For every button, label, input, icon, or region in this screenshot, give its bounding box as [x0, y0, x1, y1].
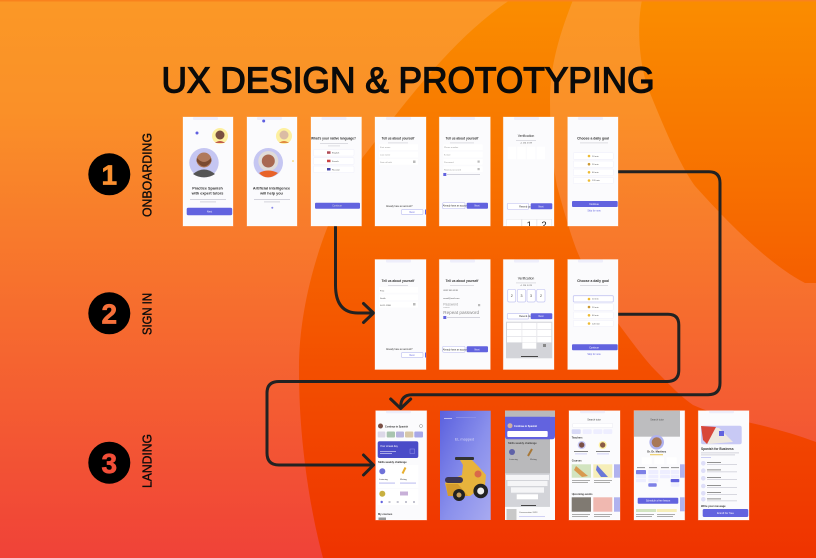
- screen: scooter splash: [440, 411, 491, 520]
- screen: sign in verification: 2: [540, 294, 542, 298]
- screen: native language: French: [332, 160, 340, 163]
- screen: verification: [503, 117, 554, 231]
- arrow: onboarding to landing: [391, 172, 720, 408]
- title: UX DESIGN & PROTOTYPING: [162, 60, 654, 100]
- arrow: sign in to landing: [267, 314, 679, 475]
- screen: tell us about yourself 1: Next: [410, 211, 415, 214]
- screen: sign in daily goal: 20 min: [592, 307, 599, 309]
- screen: home: Your streak day: [380, 444, 399, 448]
- step 3: landing: 3: [102, 448, 117, 479]
- screen: daily goal: Skip for now: [587, 210, 601, 213]
- screen: sign in daily goal: Continue: [589, 346, 599, 349]
- screen: sign in details 2: Next: [475, 348, 480, 351]
- screen: verification: Next: [539, 205, 544, 208]
- screen: daily goal: 10 min: [592, 156, 599, 158]
- screen: spanish for business: Spanish for Business: [701, 447, 734, 451]
- screen: tutor profile: Schedule a free lesson: [646, 500, 671, 503]
- screen: search tutor: Teachers: [572, 436, 583, 440]
- screen: home: Continue in Spanish: [385, 426, 409, 428]
- screen: tutor profile: Dr. Dr. Martinez: [647, 450, 667, 454]
- screen: tell us about yourself 1: Already have an account?: [386, 205, 413, 208]
- screen: sign in details 1: First: [380, 290, 385, 292]
- screen: daily goal: Continue: [589, 203, 599, 206]
- screen: sign in details 1: Smith: [380, 297, 386, 300]
- screen: daily goal: 60 min: [592, 172, 599, 174]
- screen: home: [376, 411, 427, 520]
- screen: sign in daily goal: 10 min: [592, 299, 599, 301]
- screen: tutor profile: Search tutor: [650, 418, 664, 421]
- screen: sign in details 1: 04.11.1986: [380, 305, 392, 307]
- screen: tell us about yourself 1: Date of birth: [380, 161, 393, 164]
- screen: sign in details 2: Tell us about yourself: [446, 279, 479, 283]
- screen: native language: Russian: [332, 169, 341, 171]
- screen: home: My courses: [378, 512, 393, 516]
- step 1: onboarding: [88, 133, 154, 217]
- screen: tell us about yourself 2: Next: [475, 205, 480, 208]
- screen: sign in details 2: email@mail.com: [443, 298, 460, 300]
- screen: home: Listening: [379, 478, 389, 481]
- screen: sign in details 2: ********: [443, 308, 450, 310]
- screen: sign in details 1: [375, 260, 426, 370]
- screen: home: Writing: [400, 478, 408, 481]
- screen: native language: Continue: [332, 205, 342, 208]
- screen: artificial intelligence: [247, 117, 297, 226]
- screen: sign in verification: Resend code: [519, 316, 533, 318]
- screen: tell us about yourself 2: E-mail: [444, 154, 451, 156]
- step 1: onboarding: 1: [102, 160, 117, 190]
- screen: tell us about yourself 2: Tell us about yourself: [446, 136, 479, 140]
- screen: sign in verification: +1 234 5 678: [520, 285, 533, 287]
- screen: sign in details 2: Repeat password: [443, 310, 479, 315]
- screen: practice spanish: Practice Spanish: [192, 186, 223, 190]
- screen: spanish for business: Enroll for free: [717, 511, 734, 515]
- screen: sign in daily goal: 120 min: [592, 323, 601, 325]
- screen: native language: What's your native language?: [311, 136, 356, 140]
- screen: practice spanish: Next: [207, 210, 212, 214]
- screen: search keyboard: Skills weekly challenge: [508, 441, 537, 445]
- screen: search tutor: Search tutor: [587, 418, 601, 421]
- step 3: landing: LANDING: [140, 434, 154, 488]
- screen: daily goal: 20 min: [592, 164, 599, 166]
- screen: daily goal: Choose a daily goal: [577, 136, 609, 140]
- screen: sign in verification: Next: [539, 315, 544, 318]
- screen: scooter splash: EL mapped: [455, 438, 474, 442]
- screen: search tutor: [569, 411, 620, 520]
- screen: sign in verification: 3: [520, 294, 522, 298]
- screen: verification: Resend code: [519, 206, 533, 208]
- screen: tell us about yourself 2: Phone number: [444, 146, 459, 149]
- screen: home: Skills weekly challenge: [378, 460, 407, 464]
- screen: search keyboard: Conversation 2023: [519, 511, 538, 514]
- screen: practice spanish: [183, 117, 233, 226]
- screen: native language: [311, 117, 362, 226]
- screen: sign in details 2: Already have an account?: [443, 348, 470, 351]
- screen: sign in details 1: Already have an account?: [386, 348, 413, 351]
- screen: tell us about yourself 2: [439, 117, 490, 226]
- screen: native language: English: [332, 153, 340, 155]
- screen: tell us about yourself 1: [375, 117, 426, 226]
- screen: sign in daily goal: Choose a daily goal: [577, 279, 609, 283]
- screen: tell us about yourself 2: Password: [444, 161, 454, 164]
- screen: verification: 1: [527, 220, 532, 231]
- screen: tell us about yourself 2: Repeat password: [444, 168, 462, 171]
- screen: sign in verification: 2: [511, 294, 513, 298]
- screen: sign in verification: Verification: [518, 276, 534, 280]
- screen: tell us about yourself 1: Last name: [380, 154, 391, 156]
- screen: search keyboard: Listening: [509, 458, 519, 461]
- screen: artificial intelligence: will help you: [259, 192, 284, 196]
- screen: daily goal: 120 min: [592, 180, 601, 182]
- screen: spanish for business: [698, 411, 749, 520]
- screen: verification: Verification: [518, 134, 534, 138]
- screen: artificial intelligence: Artificial intelligence: [253, 186, 290, 190]
- screen: search tutor: Courses: [572, 460, 582, 462]
- screen: tell us about yourself 1: First name: [380, 146, 391, 149]
- screen: sign in daily goal: [568, 260, 618, 370]
- screen: tell us about yourself 2: Already have an account?: [443, 205, 470, 208]
- screen: search keyboard: Continue in Spanish: [514, 425, 538, 428]
- screen: tell us about yourself 1: Tell us about yourself: [382, 136, 415, 140]
- step 2: sign in: SIGN IN: [140, 293, 154, 335]
- step 2: sign in: 2: [102, 298, 117, 330]
- screen: search tutor: Upcoming events: [572, 493, 593, 496]
- screen: sign in verification: [503, 260, 554, 370]
- screen: search keyboard: [505, 411, 555, 520]
- screen: sign in daily goal: 60 min: [592, 315, 599, 317]
- screen: sign in details 1: Tell us about yourself: [382, 279, 415, 283]
- screen: sign in verification: 3: [530, 294, 532, 298]
- screen: spanish for business: Write your message: [701, 504, 726, 508]
- screen: sign in daily goal: Skip for now: [587, 353, 601, 356]
- screen: verification: +1 234 5 678: [520, 142, 533, 144]
- screen: sign in details 2: [439, 260, 490, 370]
- screen: search keyboard: Writing: [530, 458, 538, 461]
- screen: practice spanish: with expert tutors: [191, 192, 223, 196]
- screen: tutor profile: [634, 411, 685, 520]
- screen: verification: 2: [541, 220, 547, 231]
- step 2: sign in: [88, 292, 154, 335]
- screen: daily goal: [568, 117, 618, 226]
- arrow: onboarding to sign in: [336, 227, 374, 322]
- step 1: onboarding: ONBOARDING: [140, 133, 154, 217]
- screen: sign in details 1: Next: [410, 354, 415, 357]
- screen: sign in details 2: Password: [443, 302, 458, 306]
- screen: sign in details 2: 0932 965 0198: [443, 290, 459, 292]
- step 3: landing: [88, 434, 154, 488]
